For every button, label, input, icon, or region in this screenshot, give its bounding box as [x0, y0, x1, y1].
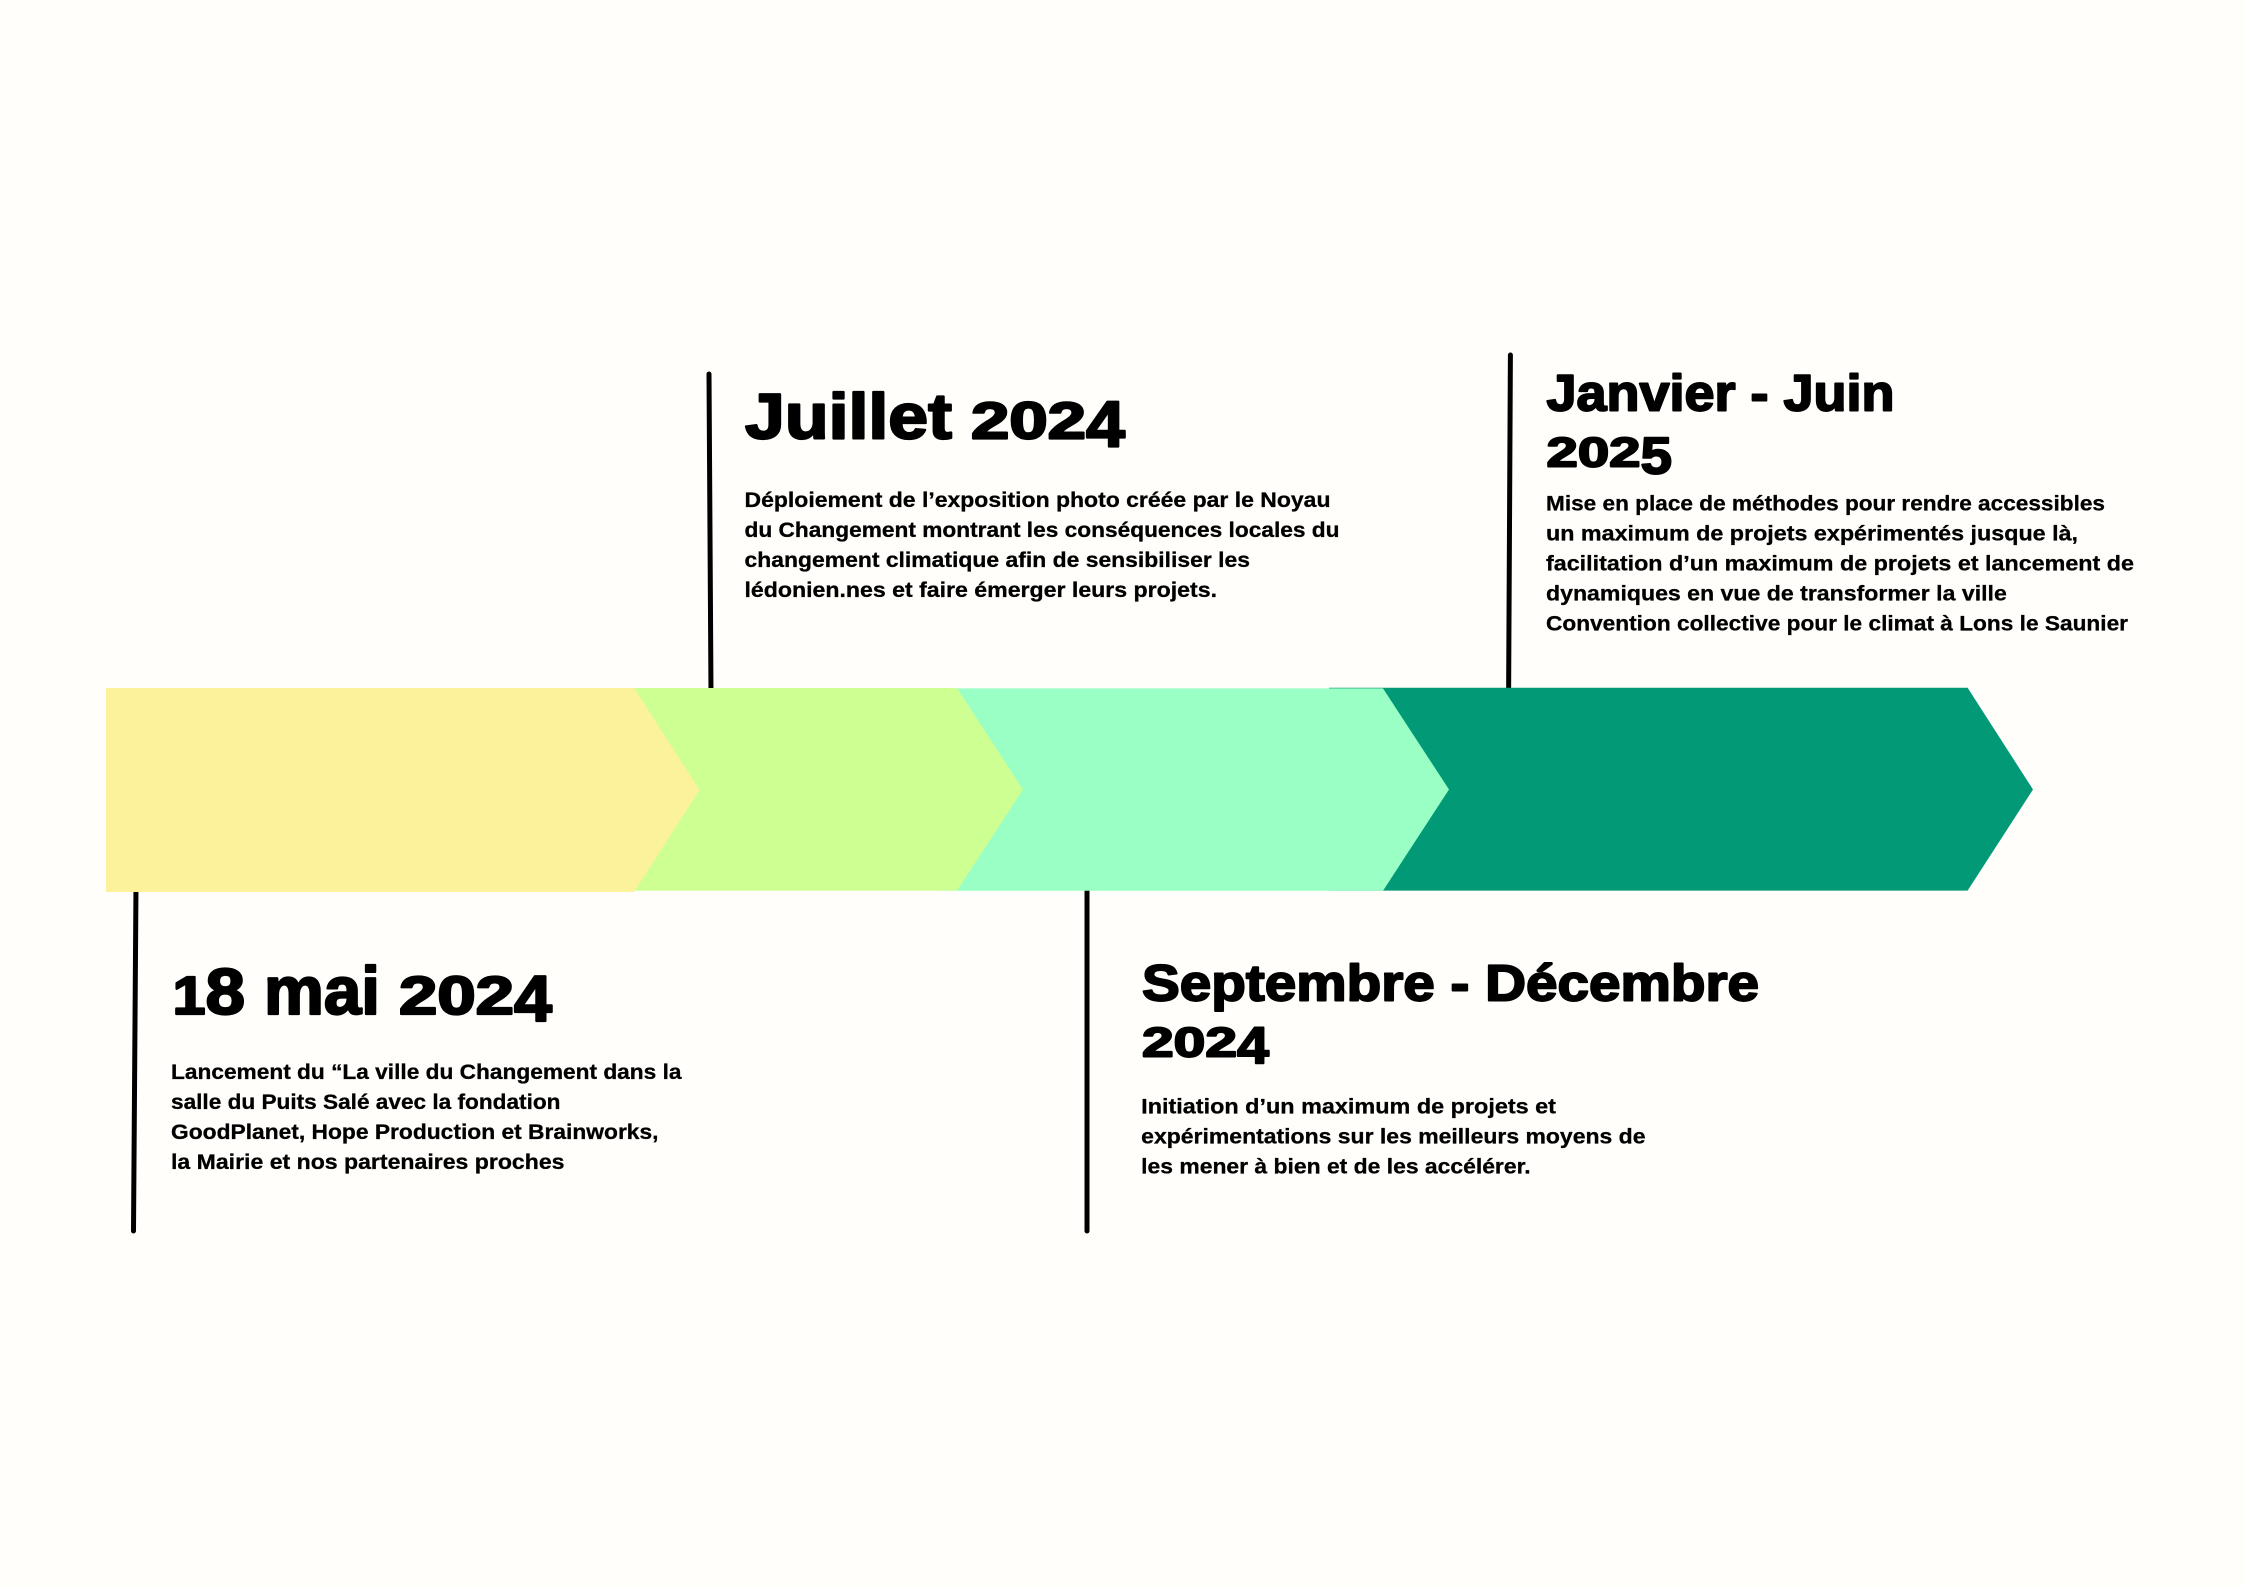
arrow: yellow segment [106, 688, 700, 892]
description: Septembre - Décembre 2024: expérimentations sur les meilleurs moyens de [1141, 1124, 1646, 1148]
arrow: dark green segment [1329, 688, 2033, 891]
description: 18 mai 2024 [171, 1060, 683, 1174]
panel: Juillet 2024 [744, 381, 1340, 602]
description: Janvier - Juin 2025: dynamiques en vue de transformer la ville [1546, 582, 2007, 606]
panel: Septembre - Décembre 2024 [1141, 955, 1759, 1178]
description: Septembre - Décembre 2024: les mener à bien et de les accélérer. [1141, 1154, 1531, 1178]
heading: Janvier - Juin 2025: 5 [1640, 428, 1672, 486]
panel: 18 mai 2024 [171, 953, 683, 1174]
arrow: lime segment [600, 688, 1023, 891]
heading: Septembre - Décembre 2024: 202 [1142, 1019, 1237, 1066]
heading: 18 mai 2024: 4 [514, 962, 552, 1035]
description: 18 mai 2024: GoodPlanet, Hope Production et Brainworks, [171, 1120, 658, 1144]
panel: Janvier - Juin 2025 [1546, 365, 2134, 636]
heading: 18 mai 2024: 18 [173, 955, 245, 1028]
heading: 18 mai 2024: 202 [399, 966, 514, 1026]
heading: Septembre - Décembre 2024: Septembre - Décembre [1142, 955, 1759, 1012]
description: Juillet 2024: du Changement montrant les conséquences locales du [744, 518, 1340, 542]
arrow: mint segment [940, 688, 1449, 891]
marker line: Juillet 2024 [709, 374, 711, 695]
heading: Juillet 2024 [745, 381, 1125, 461]
marker line: 18 mai 2024 [134, 885, 136, 1231]
heading: Septembre - Décembre 2024: 4 [1237, 1018, 1269, 1076]
description: Juillet 2024 [744, 488, 1340, 602]
description: Janvier - Juin 2025 [1546, 492, 2134, 636]
heading: Janvier - Juin 2025: Janvier - Juin [1546, 365, 1894, 422]
description: Juillet 2024: Déploiement de l’exposition photo créée par le Noyau [744, 488, 1330, 512]
description: Septembre - Décembre 2024 [1141, 1094, 1646, 1178]
description: Janvier - Juin 2025: facilitation d’un maximum de projets et lancement de [1546, 552, 2134, 576]
marker line: Septembre - Décembre 2024 [1084, 885, 1090, 1231]
heading: Janvier - Juin 2025 [1546, 365, 1894, 486]
description: Septembre - Décembre 2024: Initiation d’un maximum de projets et [1141, 1094, 1556, 1118]
heading: Juillet 2024: Juillet [745, 381, 952, 453]
description: Juillet 2024: changement climatique afin de sensibiliser les [744, 548, 1250, 572]
heading: Janvier - Juin 2025: 202 [1546, 429, 1640, 476]
description: Janvier - Juin 2025: un maximum de projets expérimentés jusque là, [1546, 522, 2078, 546]
description: Janvier - Juin 2025: Mise en place de méthodes pour rendre accessibles [1546, 492, 2105, 516]
description: 18 mai 2024: la Mairie et nos partenaires proches [171, 1150, 565, 1174]
heading: Juillet 2024: 4 [1086, 388, 1125, 461]
description: Juillet 2024: lédonien.nes et faire émerger leurs projets. [744, 578, 1217, 602]
heading: Septembre - Décembre 2024 [1142, 955, 1759, 1076]
heading: 18 mai 2024 [173, 953, 552, 1035]
marker line: Janvier - Juin 2025 [1509, 355, 1510, 695]
heading: 18 mai 2024: mai [264, 953, 380, 1029]
description: 18 mai 2024: salle du Puits Salé avec la fondation [171, 1090, 560, 1114]
description: Janvier - Juin 2025: Convention collective pour le climat à Lons le Saunier [1546, 612, 2129, 636]
heading: Juillet 2024: 202 [971, 393, 1086, 451]
description: 18 mai 2024: Lancement du “La ville du Changement dans la [171, 1060, 683, 1084]
